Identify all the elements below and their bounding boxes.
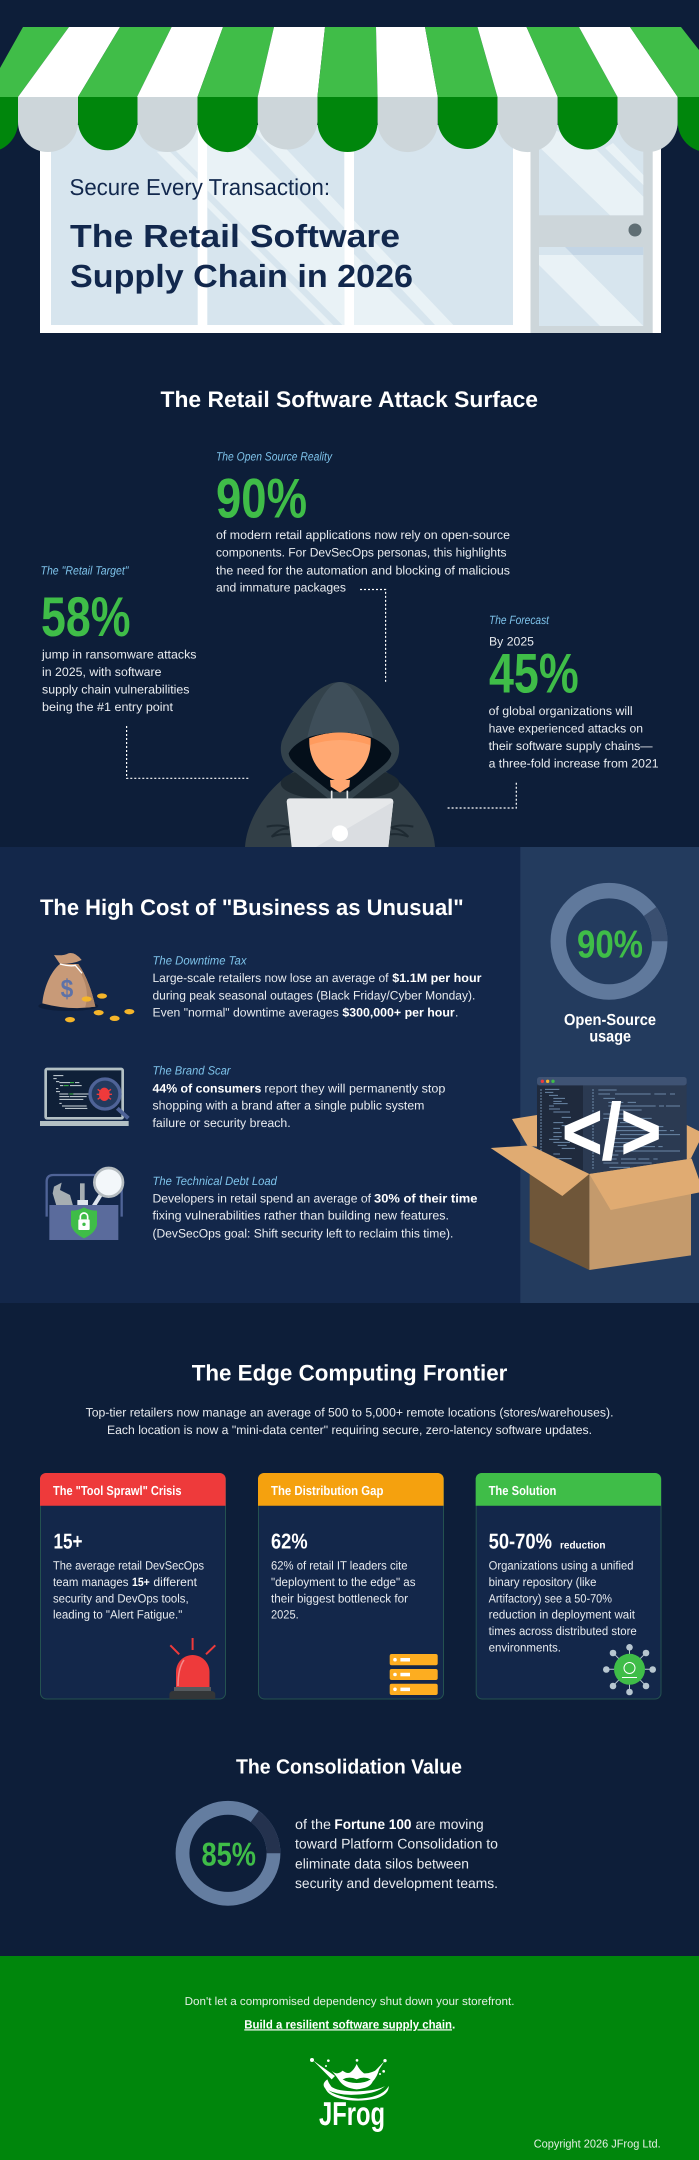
donut chart: 85% bbox=[182, 1808, 274, 1899]
card: the solution: binary repository (like bbox=[489, 1575, 597, 1589]
stat: retail target: in 2025, with software bbox=[42, 665, 162, 679]
icon: server stack bbox=[390, 1654, 438, 1695]
card: the solution: times across distributed store bbox=[489, 1624, 637, 1638]
icon: open box with code window: </> bbox=[562, 1087, 661, 1175]
icon: open box with code window bbox=[491, 1077, 699, 1270]
text: the technical debt load: The Technical Debt Load bbox=[152, 1174, 277, 1188]
text: fortune 100 bbox=[295, 1816, 498, 1891]
text: the brand scar: report they will permanently stop bbox=[264, 1081, 446, 1095]
row: the technical debt load bbox=[47, 1168, 478, 1240]
card: tool sprawl crisis: The "Tool Sprawl" Crisis bbox=[53, 1483, 182, 1498]
intro text: edge computing: Top-tier retailers now manage an average of 500 to 5,000+ remote locations (stores/warehouses). bbox=[86, 1406, 614, 1420]
text: the downtime tax bbox=[152, 953, 482, 1020]
title: Supply Chain in 2026 bbox=[70, 258, 413, 294]
intro text: edge computing bbox=[86, 1406, 614, 1437]
door handle bbox=[628, 224, 642, 236]
stat: forecast: 45% bbox=[489, 642, 579, 705]
stat: retail target bbox=[40, 564, 196, 714]
icon: money bag bbox=[38, 953, 134, 1022]
text: the technical debt load bbox=[152, 1174, 478, 1240]
card: tool sprawl crisis: The average retail DevSecOps bbox=[53, 1559, 204, 1573]
text: the downtime tax: during peak seasonal outages (Black Friday/Cyber Monday). bbox=[152, 988, 475, 1002]
card: the solution: 50-70% bbox=[489, 1530, 552, 1554]
icon: toolbox with shield bbox=[47, 1168, 123, 1240]
icon: laptop with bug under magnifier bbox=[40, 1069, 129, 1126]
text: fortune 100: are moving bbox=[416, 1816, 484, 1832]
text: the technical debt load: fixing vulnerabilities rather than building new features. bbox=[152, 1209, 449, 1223]
stat: open source reality: and immature packages bbox=[216, 581, 346, 595]
card: distribution gap: 62% of retail IT leaders cite bbox=[271, 1559, 408, 1573]
text: fortune 100: Fortune 100 bbox=[334, 1816, 412, 1832]
caption: open-source usage: Open-Source bbox=[564, 1012, 656, 1029]
card: tool sprawl crisis: 15+ bbox=[132, 1575, 150, 1589]
card: distribution gap: 2025. bbox=[271, 1608, 299, 1622]
intro text: edge computing: Each location is now a "mini-data center" requiring secure, zero-latency software updates. bbox=[107, 1423, 592, 1437]
icon: hooded hacker with laptop bbox=[245, 682, 435, 847]
text: the brand scar: failure or security breach. bbox=[152, 1116, 291, 1130]
text: the brand scar: The Brand Scar bbox=[152, 1064, 231, 1078]
card: the solution: The Solution bbox=[489, 1483, 556, 1498]
stat: retail target: The "Retail Target" bbox=[40, 564, 129, 578]
stat: forecast: The Forecast bbox=[489, 613, 550, 627]
stat: open source reality bbox=[216, 450, 510, 595]
copyright: Copyright 2026 JFrog Ltd. bbox=[534, 2139, 661, 2151]
heading: consolidation value: The Consolidation Value bbox=[236, 1755, 462, 1778]
stat: forecast: of global organizations will bbox=[489, 704, 633, 718]
footer bbox=[0, 1956, 699, 2160]
caption: open-source usage: usage bbox=[589, 1029, 631, 1046]
heading: high cost: The High Cost of "Business as Unusual" bbox=[40, 895, 464, 920]
text: the technical debt load: Developers in retail spend an average of bbox=[152, 1191, 372, 1205]
stat: forecast: a three-fold increase from 2021 bbox=[489, 756, 659, 770]
donut chart: 85%: 85% bbox=[202, 1836, 256, 1873]
caption: open-source usage bbox=[564, 1012, 656, 1046]
stat: forecast: By 2025 bbox=[489, 635, 534, 649]
stat: open source reality: of modern retail applications now rely on open-source bbox=[216, 528, 510, 542]
text: the brand scar: 44% of consumers bbox=[152, 1081, 262, 1095]
text: fortune 100: security and development teams. bbox=[295, 1875, 498, 1891]
heading: edge computing frontier: The Edge Computing Frontier bbox=[192, 1361, 508, 1386]
connector: open source to hacker bbox=[360, 590, 386, 682]
logo: JFrog bbox=[310, 2058, 389, 2132]
text: fortune 100: of the bbox=[295, 1816, 331, 1832]
panel: high cost of business as unusual bbox=[0, 847, 699, 1303]
card: tool sprawl crisis: team manages bbox=[53, 1575, 128, 1589]
right column: open-source usage bbox=[491, 847, 699, 1303]
stat: forecast: have experienced attacks on bbox=[489, 722, 643, 736]
card: tool sprawl crisis bbox=[40, 1473, 226, 1699]
subtitle: Secure Every Transaction: bbox=[70, 174, 330, 200]
text: the downtime tax: . bbox=[455, 1006, 458, 1020]
donut chart: 90% bbox=[558, 891, 660, 992]
text: the downtime tax: $1.1M per hour bbox=[392, 971, 482, 985]
card: distribution gap: The Distribution Gap bbox=[271, 1483, 383, 1498]
connector: retail target to hacker bbox=[127, 726, 249, 778]
logo: JFrog: JFrog bbox=[319, 2095, 385, 2132]
text: the downtime tax: Even "normal" downtime averages bbox=[152, 1006, 339, 1020]
stat: retail target: supply chain vulnerabilities bbox=[42, 682, 190, 696]
card: the solution: Artifactory) see a 50-70% bbox=[489, 1591, 612, 1605]
text: the technical debt load: (DevSecOps goal: Shift security left to reclaim this time). bbox=[152, 1226, 453, 1240]
text: the downtime tax: $300,000+ per hour bbox=[342, 1006, 455, 1020]
card: distribution gap: "deployment to the edge" as bbox=[271, 1575, 416, 1589]
text: the downtime tax: The Downtime Tax bbox=[152, 953, 247, 967]
stat: forecast bbox=[489, 613, 659, 770]
awning bbox=[0, 27, 699, 152]
store building bbox=[40, 125, 661, 333]
stat: open source reality: the need for the automation and blocking of malicious bbox=[216, 563, 510, 577]
row: the downtime tax bbox=[38, 953, 482, 1022]
call to action: . bbox=[452, 2017, 455, 2031]
stat: open source reality: The Open Source Reality bbox=[216, 450, 333, 464]
call to action bbox=[185, 1996, 514, 2031]
stat: open source reality: components. For DevSecOps personas, this highlights bbox=[216, 546, 506, 560]
card: distribution gap bbox=[258, 1473, 444, 1699]
stat: open source reality: 90% bbox=[216, 467, 307, 530]
card: tool sprawl crisis: 15+ bbox=[54, 1530, 82, 1554]
card: the solution: Organizations using a unified bbox=[489, 1559, 634, 1573]
card: the solution: environments. bbox=[489, 1640, 561, 1654]
card: distribution gap: 62% bbox=[271, 1530, 308, 1554]
row: the brand scar bbox=[40, 1064, 446, 1130]
text: the downtime tax: Large-scale retailers now lose an average of bbox=[152, 971, 389, 985]
stat: retail target: being the #1 entry point bbox=[42, 700, 174, 714]
connector: forecast to hacker bbox=[447, 783, 516, 808]
stat: forecast: their software supply chains— bbox=[489, 739, 653, 753]
card: the solution: reduction bbox=[560, 1540, 606, 1552]
call to action: Build a resilient software supply chain bbox=[244, 2017, 452, 2031]
stat: retail target: 58% bbox=[41, 585, 130, 648]
icon: red siren bbox=[169, 1638, 215, 1699]
card: tool sprawl crisis: leading to "Alert Fatigue." bbox=[53, 1608, 182, 1622]
stat: retail target: jump in ransomware attacks bbox=[41, 647, 196, 661]
icon: money bag: $ bbox=[61, 974, 73, 1003]
card: the solution: reduction in deployment wait bbox=[489, 1608, 636, 1622]
text: the brand scar bbox=[152, 1064, 446, 1130]
title: The Retail Software bbox=[70, 218, 400, 254]
title bbox=[70, 218, 413, 294]
heading: attack surface: The Retail Software Attack Surface bbox=[160, 387, 538, 412]
icon: green network node bbox=[603, 1644, 656, 1695]
text: fortune 100: eliminate data silos between bbox=[295, 1855, 469, 1871]
text: the technical debt load: 30% of their time bbox=[374, 1191, 478, 1205]
card: the solution bbox=[476, 1473, 661, 1699]
call to action: Don't let a compromised dependency shut down your storefront. bbox=[185, 1996, 514, 2008]
text: the brand scar: shopping with a brand after a single public system bbox=[152, 1099, 424, 1113]
card: tool sprawl crisis: different bbox=[153, 1575, 198, 1589]
donut chart: 90%: 90% bbox=[577, 923, 643, 966]
card: distribution gap: their biggest bottleneck for bbox=[271, 1591, 408, 1605]
card: tool sprawl crisis: security and DevOps tools, bbox=[53, 1591, 189, 1605]
storefront hero bbox=[0, 27, 699, 333]
text: fortune 100: toward Platform Consolidation to bbox=[295, 1836, 498, 1852]
